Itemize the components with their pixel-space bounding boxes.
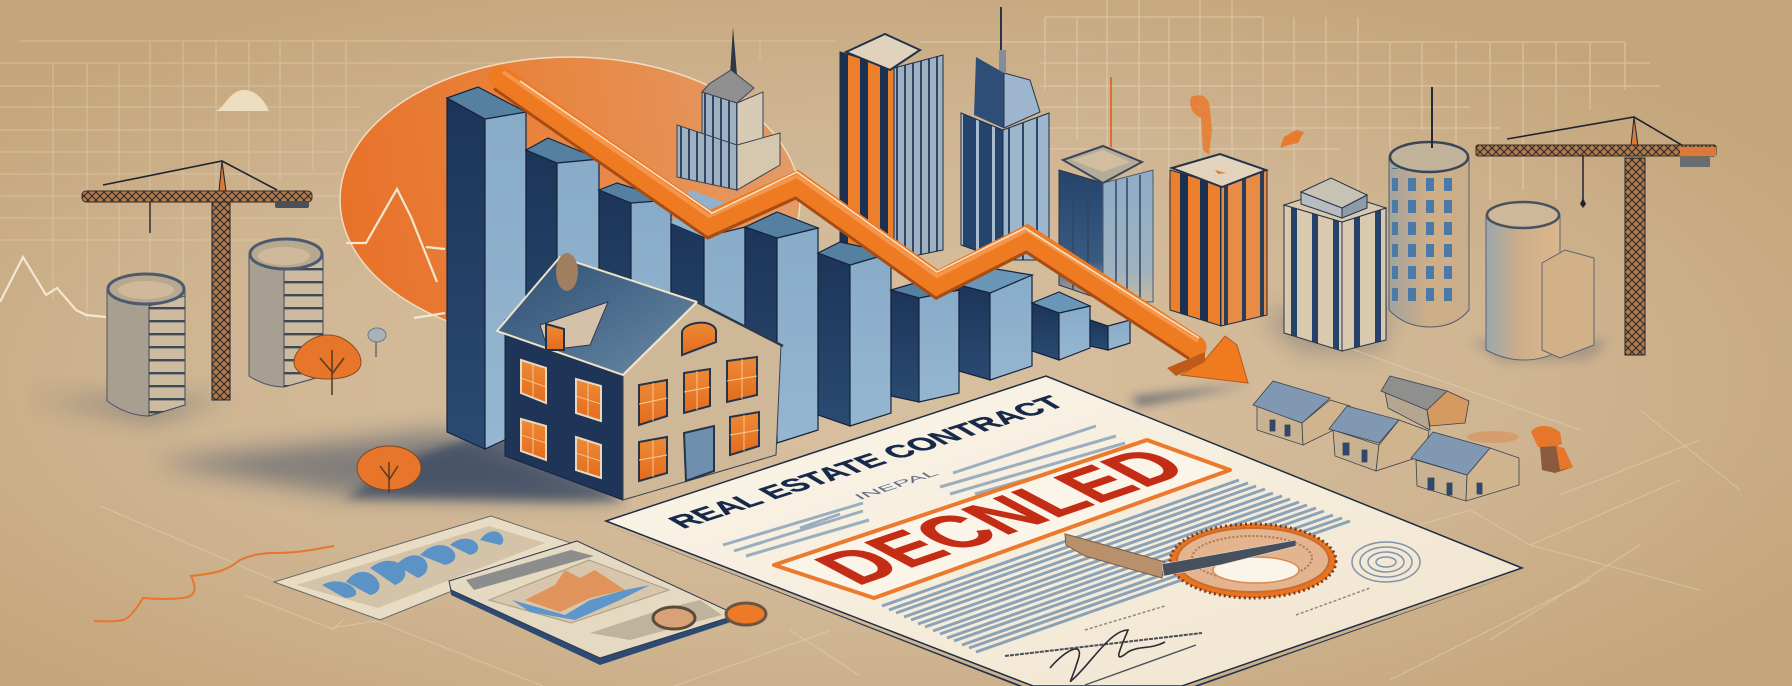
- bar 1: [447, 87, 526, 449]
- orange squiggle line: [94, 546, 334, 621]
- right background grid: [920, 0, 1660, 210]
- crane jib: [1476, 145, 1716, 156]
- orange paint smears: [1190, 95, 1304, 155]
- house roof: [497, 257, 697, 375]
- orange smear behind small houses: [1467, 431, 1519, 443]
- bar 3: [599, 183, 671, 420]
- lower text lines: [882, 480, 1350, 652]
- contract document: [604, 376, 1524, 686]
- contract subtitle: INEPAL: [852, 469, 943, 502]
- bar 10: [1090, 320, 1130, 350]
- left background grid: [0, 41, 835, 320]
- bar 5: [745, 212, 818, 443]
- floor grid lines: [100, 345, 1740, 686]
- crane cables: [103, 161, 277, 190]
- icon: pale sun dome: [216, 90, 269, 111]
- arrow head: [1181, 336, 1248, 383]
- bar 9: [1032, 292, 1090, 360]
- bar 7: [891, 280, 959, 402]
- crane: right: [1476, 117, 1716, 355]
- small house: front: [1411, 432, 1519, 501]
- building: cream tower with windows: [1284, 178, 1386, 351]
- paper shadow edge: [604, 524, 1524, 686]
- bar 8: [959, 268, 1032, 380]
- crane mast: [1625, 158, 1645, 355]
- tree: small orange tree by houses: [1531, 426, 1573, 473]
- bar 6: [818, 242, 891, 426]
- arrow: downward trend: [500, 72, 1248, 383]
- coin: orange: [726, 603, 766, 625]
- crane mast: [212, 200, 230, 400]
- small house: middle: [1329, 406, 1429, 471]
- window muntins: [521, 359, 759, 477]
- left wall windows: [521, 360, 601, 478]
- gable window: [682, 323, 716, 355]
- heartbeat lines: [0, 189, 445, 318]
- small house: back: [1381, 376, 1469, 430]
- chart card: front: [449, 541, 766, 665]
- front door: [684, 426, 714, 481]
- house: [497, 253, 783, 500]
- small house: left: [1253, 381, 1350, 445]
- declined stamp: [774, 438, 1230, 598]
- tree: round orange tree: [357, 446, 421, 493]
- orange antenna: [1110, 77, 1112, 147]
- skyscraper: grey stepped tower: [677, 27, 780, 190]
- house left wall: [505, 320, 623, 500]
- house front wall: [623, 302, 781, 500]
- cylinder tower: left 2: [249, 239, 323, 387]
- small print: [1085, 588, 1370, 630]
- coin: tan: [653, 607, 695, 629]
- bar 4: [671, 190, 745, 420]
- skyscraper: blue spire tower: [961, 7, 1049, 260]
- dormer: [540, 302, 608, 350]
- ground shadows: [29, 300, 1610, 502]
- bar chart: falling blue columns: [447, 87, 1130, 449]
- pen: [1065, 534, 1296, 578]
- crane jib: [82, 191, 312, 202]
- skyscraper: orange striped tower: [840, 34, 943, 260]
- chimney smudge: [556, 253, 578, 291]
- building: blue fading tower: [1059, 77, 1153, 302]
- paper sheet: [606, 376, 1522, 686]
- large orange circle: [340, 57, 800, 343]
- bar 2: [526, 138, 599, 420]
- round seal: [1170, 524, 1336, 598]
- antenna: [1431, 87, 1433, 148]
- building: orange striped block: [1170, 154, 1267, 326]
- front wall windows: [639, 357, 759, 481]
- cylinder tower: left 1: [107, 274, 185, 416]
- fingerprint mark: [1352, 542, 1420, 582]
- tree: upper orange tree: [294, 335, 361, 395]
- upper text lines: [723, 426, 1130, 556]
- icon: small balloon: [368, 328, 386, 357]
- chart card: back: [274, 516, 571, 620]
- contract title: REAL ESTATE CONTRACT: [662, 392, 1073, 533]
- building: cylinder with annex: [1486, 202, 1594, 360]
- chart picture: [489, 560, 669, 623]
- crane: left: [82, 161, 312, 400]
- building: cylindrical tower: [1389, 87, 1469, 327]
- signature lines and scribble: [1005, 630, 1202, 685]
- declined stamp: DECNLED: [795, 438, 1207, 594]
